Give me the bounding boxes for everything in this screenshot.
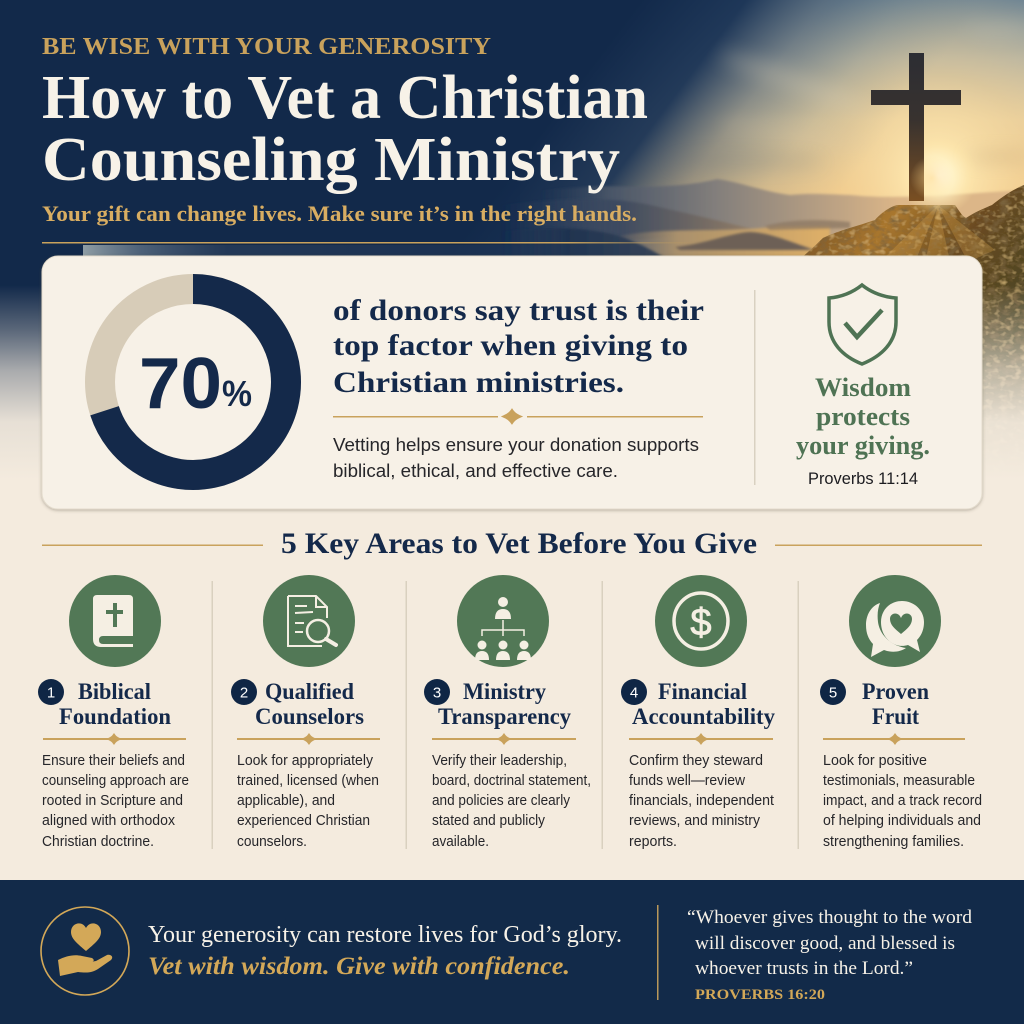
statistic statement: Christian ministries. bbox=[333, 366, 624, 399]
panel: statistic card bbox=[42, 256, 982, 509]
number badge 4 bbox=[621, 679, 647, 705]
icon: speech bubbles with heart bbox=[849, 575, 941, 667]
description: financials, independent bbox=[629, 792, 775, 809]
scripture quote bbox=[687, 907, 973, 1003]
supporting text bbox=[333, 435, 699, 481]
number badge 4: 4 bbox=[630, 684, 638, 702]
description: testimonials, measurable bbox=[823, 772, 975, 789]
description bbox=[629, 752, 775, 850]
description bbox=[432, 752, 591, 850]
description: impact, and a track record bbox=[823, 792, 982, 809]
donut chart: 70 percent: % bbox=[222, 373, 252, 414]
heading bbox=[255, 679, 364, 729]
description: Look for appropriately bbox=[237, 752, 373, 769]
panel: financial accountability bbox=[621, 575, 775, 850]
donut chart: 70 percent bbox=[100, 289, 286, 475]
heading: Proven bbox=[862, 679, 929, 704]
ornament bbox=[823, 733, 965, 745]
description: stated and publicly bbox=[432, 812, 545, 829]
heading: Accountability bbox=[632, 704, 775, 729]
ornament bbox=[432, 733, 576, 745]
closing message bbox=[148, 922, 622, 980]
description: Confirm they steward bbox=[629, 752, 763, 769]
description: trained, licensed (when bbox=[237, 772, 379, 789]
description bbox=[42, 752, 189, 850]
icon: document and magnifier bbox=[263, 575, 355, 667]
description: counseling approach are bbox=[42, 772, 189, 789]
panel: proven fruit bbox=[820, 575, 982, 850]
wisdom callout: Wisdom bbox=[815, 373, 911, 402]
donut chart: 70 percent: 70 bbox=[139, 344, 222, 424]
description: rooted in Scripture and bbox=[42, 792, 183, 809]
description: of helping individuals and bbox=[823, 812, 981, 829]
ornament bbox=[237, 733, 380, 745]
number badge 1: 1 bbox=[47, 684, 55, 702]
description: reports. bbox=[629, 833, 677, 850]
hero image: sunrise, mountains and cross bbox=[0, 0, 1024, 500]
heading: Qualified bbox=[265, 679, 354, 704]
description: Verify their leadership, bbox=[432, 752, 567, 769]
heading: Foundation bbox=[59, 704, 171, 729]
supporting text: Vetting helps ensure your donation supports bbox=[333, 435, 699, 455]
panel: footer banner bbox=[0, 880, 1024, 1024]
heading bbox=[862, 679, 929, 729]
description: board, doctrinal statement, bbox=[432, 772, 591, 789]
description: aligned with orthodox bbox=[42, 812, 175, 829]
wisdom callout: your giving. bbox=[796, 431, 930, 460]
ornament bbox=[629, 733, 773, 745]
description: and policies are clearly bbox=[432, 792, 570, 809]
subtitle: Your gift can change lives. Make sure it’s in the right hands. bbox=[42, 201, 637, 226]
closing message: Your generosity can restore lives for God’s glory. bbox=[148, 922, 622, 948]
number badge 3: 3 bbox=[433, 684, 441, 702]
icon: shield with check bbox=[829, 285, 896, 364]
number badge 5 bbox=[820, 679, 846, 705]
wisdom callout: protects bbox=[816, 402, 910, 431]
section heading: 5 Key Areas to Vet Before You Give bbox=[281, 527, 757, 560]
eyebrow: BE WISE WITH YOUR GENEROSITY bbox=[42, 34, 491, 60]
supporting text: biblical, ethical, and effective care. bbox=[333, 461, 618, 481]
scripture quote: will discover good, and blessed is bbox=[695, 933, 955, 954]
icon: heart in open hand bbox=[41, 907, 129, 995]
panel: qualified counselors bbox=[231, 575, 380, 850]
number badge 3 bbox=[424, 679, 450, 705]
description: experienced Christian bbox=[237, 812, 370, 829]
number badge 1 bbox=[38, 679, 64, 705]
heading: Financial bbox=[658, 679, 747, 704]
title bbox=[42, 64, 648, 194]
description: Christian doctrine. bbox=[42, 833, 154, 850]
ornament bbox=[43, 733, 186, 745]
heading: Biblical bbox=[78, 679, 151, 704]
description: counselors. bbox=[237, 833, 307, 850]
description: reviews, and ministry bbox=[629, 812, 760, 829]
statistic statement: top factor when giving to bbox=[333, 329, 688, 362]
heading: Fruit bbox=[872, 704, 919, 729]
scripture quote: PROVERBS 16:20 bbox=[695, 987, 825, 1003]
panel: biblical foundation bbox=[38, 575, 189, 850]
icon: bible bbox=[69, 575, 161, 667]
description: funds well—review bbox=[629, 772, 745, 789]
description bbox=[823, 752, 982, 850]
icon: organisation chart bbox=[457, 575, 549, 667]
description bbox=[237, 752, 379, 850]
closing message: Vet with wisdom. Give with confidence. bbox=[148, 953, 570, 980]
number badge 5: 5 bbox=[829, 684, 837, 702]
icon: dollar coin: $ bbox=[690, 602, 712, 644]
scripture reference: Proverbs 11:14 bbox=[808, 469, 918, 488]
icon: dollar coin bbox=[655, 575, 747, 667]
title: Counseling Ministry bbox=[42, 126, 620, 194]
description: strengthening families. bbox=[823, 833, 964, 850]
header rule bbox=[42, 242, 700, 244]
heading bbox=[59, 679, 171, 729]
cross bbox=[871, 53, 961, 201]
heading bbox=[632, 679, 775, 729]
number badge 2 bbox=[231, 679, 257, 705]
statistic statement: of donors say trust is their bbox=[333, 294, 704, 327]
heading: Counselors bbox=[255, 704, 364, 729]
hillside bbox=[780, 185, 1024, 500]
scripture quote: whoever trusts in the Lord.” bbox=[695, 958, 913, 979]
panel: ministry transparency bbox=[424, 575, 591, 850]
wisdom callout bbox=[796, 373, 930, 460]
ornamental divider bbox=[333, 408, 703, 425]
scripture quote: “Whoever gives thought to the word bbox=[687, 907, 973, 928]
heading: Transparency bbox=[438, 704, 571, 729]
statistic statement bbox=[333, 294, 704, 399]
title: How to Vet a Christian bbox=[42, 64, 648, 132]
description: applicable), and bbox=[237, 792, 335, 809]
description: Ensure their beliefs and bbox=[42, 752, 185, 769]
description: available. bbox=[432, 833, 489, 850]
number badge 2: 2 bbox=[240, 684, 248, 702]
heading: Ministry bbox=[463, 679, 546, 704]
heading bbox=[438, 679, 571, 729]
description: Look for positive bbox=[823, 752, 927, 769]
